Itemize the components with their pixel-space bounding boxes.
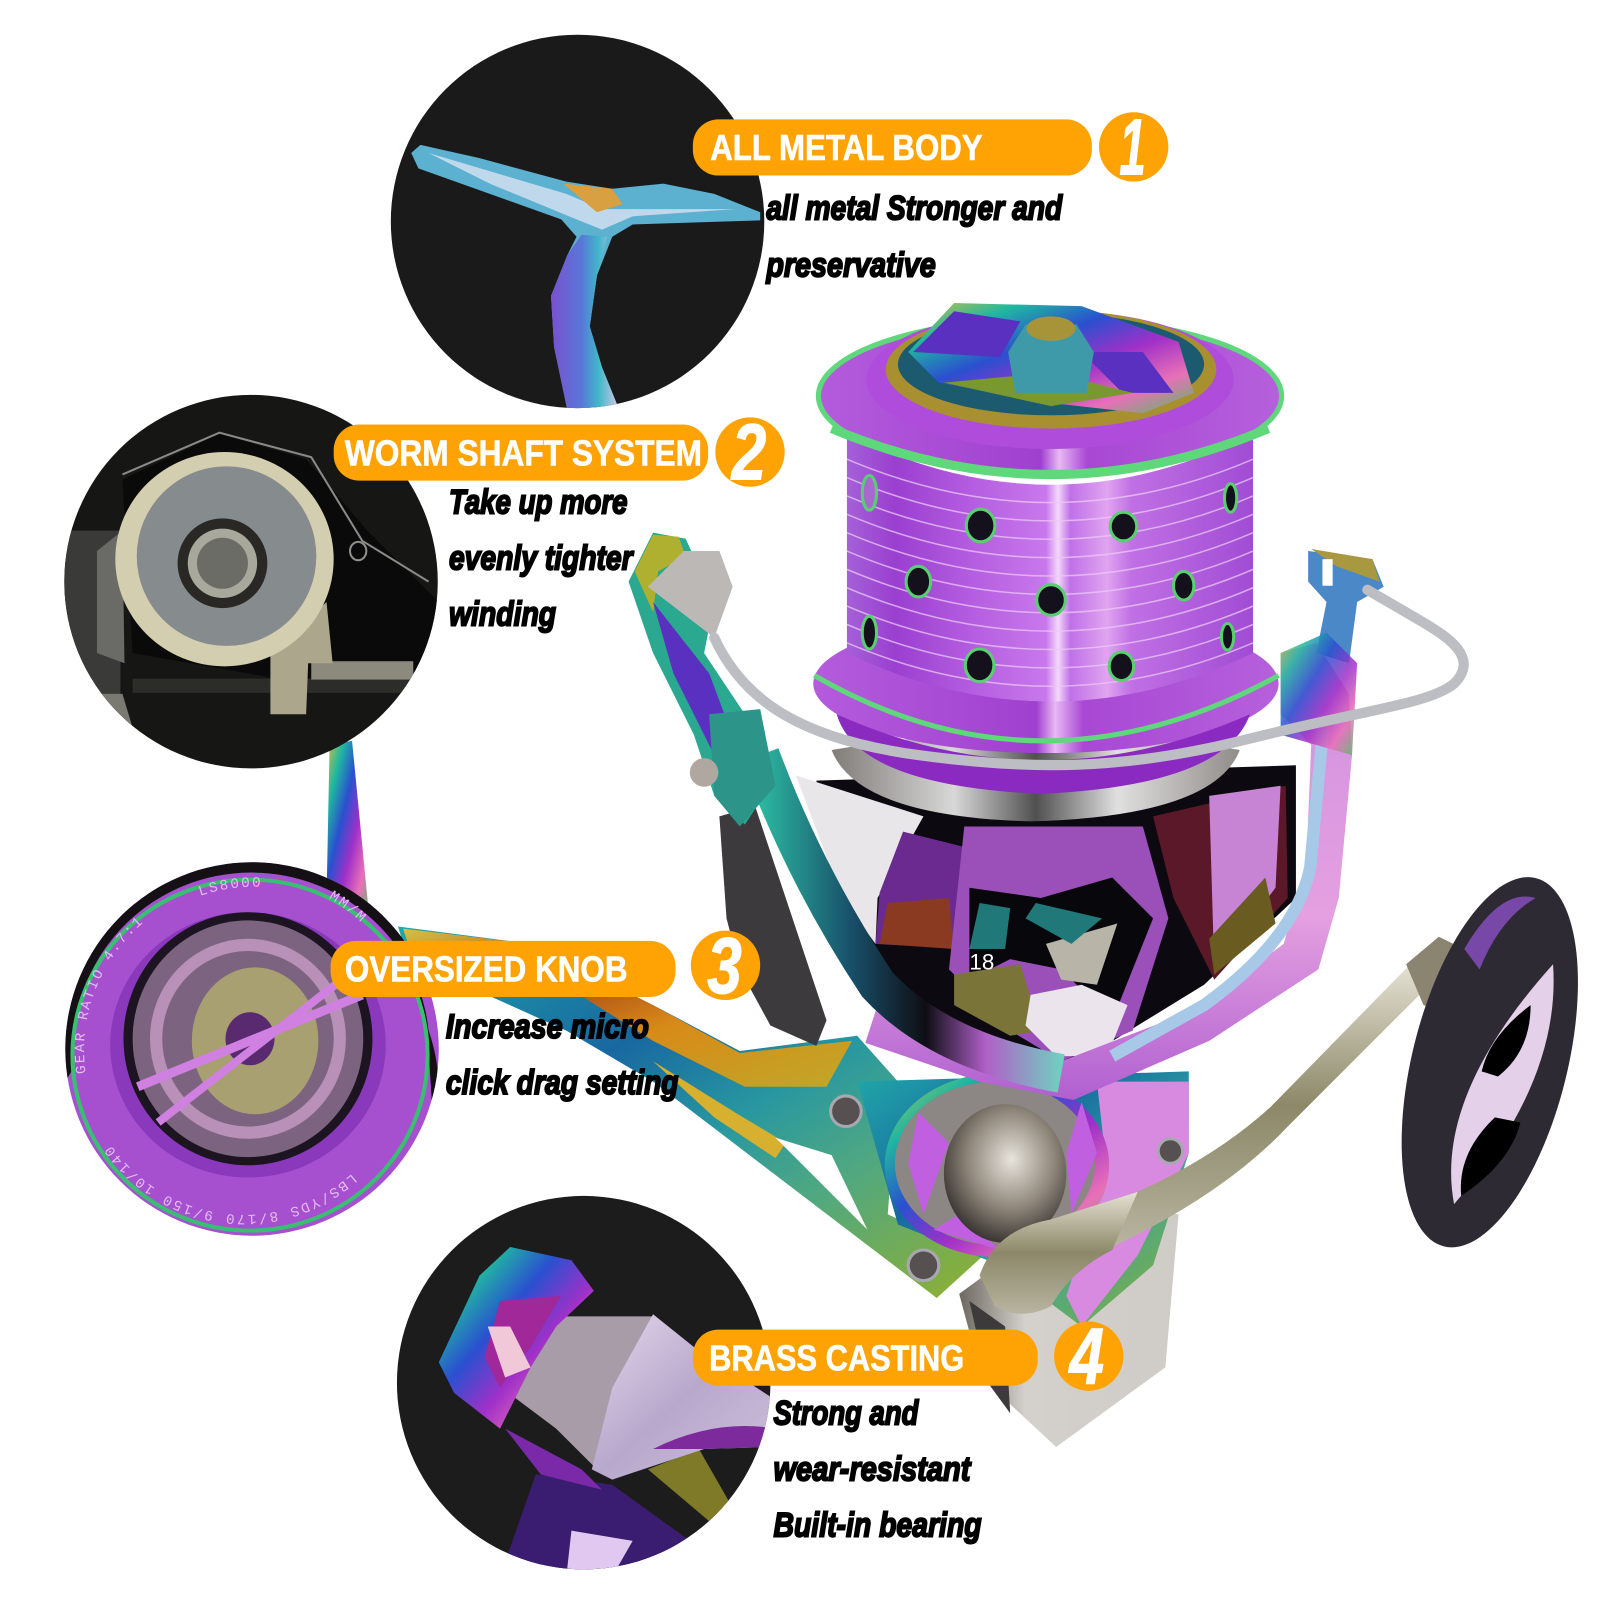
crank handle base: [980, 1192, 1138, 1314]
description: Increase micro: [446, 1008, 649, 1046]
knob face: [133, 920, 363, 1157]
callout 3: oversized knob: [331, 921, 760, 1102]
knob light: [488, 1327, 531, 1378]
description line 3: Built-in bearing: [773, 1507, 982, 1545]
rotor right lilac panel: [1209, 786, 1281, 969]
gear housing rim: [885, 1073, 1109, 1257]
hub inner: [188, 529, 257, 598]
spool lower flange green rim: [814, 676, 1279, 741]
gear dome: [944, 1104, 1066, 1243]
spool top flange: [818, 318, 1282, 473]
hub core: [197, 538, 248, 589]
handle T shape: [411, 145, 760, 410]
drag cap centre post: [1008, 324, 1094, 393]
worm spring: [311, 661, 413, 680]
number badge: [691, 931, 760, 1000]
fishing reel product illustration: [327, 303, 1600, 1447]
purple reflection: [653, 1426, 776, 1449]
spool grooves: [847, 459, 1253, 705]
frame outline: [122, 433, 429, 582]
spool top flange green front: [832, 429, 1268, 474]
white cutout in foot arm: [776, 1138, 867, 1230]
description line 2: wear-resistant: [773, 1451, 972, 1489]
description: all metal Stronger and: [766, 189, 1063, 227]
number: 2: [730, 408, 766, 497]
pattern ring: [156, 945, 340, 1133]
bail knob: [648, 551, 733, 638]
left gears: [64, 531, 120, 704]
spool top inner step: [866, 310, 1234, 449]
lower reel foot silver: [959, 1204, 1179, 1447]
heading text: WORM SHAFT SYSTEM: [345, 433, 702, 473]
spool holes: [862, 476, 1237, 682]
gear housing pink panel: [1066, 1082, 1189, 1327]
knob lilac lens: [1451, 964, 1554, 1204]
cross bars: [138, 995, 362, 1087]
heading pill: [693, 1330, 1038, 1386]
knob connector: [1406, 937, 1474, 1015]
knob outer ring: [1369, 859, 1600, 1265]
drag cap blue facet: [913, 311, 1173, 393]
gear housing body: [857, 1071, 1189, 1327]
dark inner ring: [123, 912, 372, 1165]
screws: [831, 1096, 1183, 1281]
description line 2: preservative: [765, 247, 936, 285]
heading text: BRASS CASTING: [709, 1338, 964, 1378]
description line 2: click drag setting: [446, 1064, 679, 1102]
callout 4: brass casting: [693, 1312, 1123, 1545]
bail arm screw: [690, 758, 718, 787]
dial text: gear ratio: GEAR RATIO 4.7:1: [74, 918, 142, 1074]
reel foot dark facet: [969, 1301, 1010, 1413]
number badge: [1099, 112, 1168, 182]
gear face: [137, 466, 316, 646]
black frame plate: [122, 434, 439, 684]
callout 2: worm shaft system: [334, 408, 785, 634]
knob purple highlight: [1464, 897, 1536, 969]
heading text: ALL METAL BODY: [710, 128, 983, 168]
bail arm left: [629, 533, 770, 824]
rotor left sweep arm: [760, 755, 1061, 1073]
number: 4: [1068, 1312, 1104, 1401]
reel stem behind oversized knob: [327, 741, 369, 918]
heading pill: [334, 424, 708, 481]
number badge: [1054, 1321, 1123, 1391]
rotor orange and purple cone: [876, 832, 964, 949]
rotor teal facets: [969, 903, 1102, 949]
neck purple: [505, 1429, 602, 1490]
centre hub: [226, 1012, 274, 1065]
rotor right window: [1153, 786, 1288, 980]
crank handle arm: [1112, 964, 1427, 1247]
number: 1: [1119, 102, 1146, 191]
gear housing inner: [895, 1082, 1095, 1245]
spool underside: [837, 714, 1250, 794]
purple band: [110, 912, 386, 1178]
green ring: [72, 880, 428, 1231]
dial text: capacity: LBS/YDS 8/170 9/150 10/140: [106, 1148, 357, 1224]
reel foot arm: [398, 927, 982, 1298]
drag cap dark interior: [898, 313, 1204, 415]
rotor right arm pink: [865, 643, 1352, 1100]
rainbow strip on foot arm: [653, 1061, 786, 1158]
rotor interior: [816, 765, 1296, 1066]
knob lower window: [1461, 1117, 1520, 1196]
bail arm purple inner: [653, 602, 740, 755]
description: Take up more: [449, 483, 628, 521]
bail mount gold top: [1311, 549, 1380, 582]
rotor olive facet: [954, 964, 1041, 1036]
centre disc: [192, 967, 318, 1114]
heading pill: [693, 119, 1092, 176]
rotor centre black: [969, 878, 1153, 1020]
rainbow knob: [439, 1247, 594, 1429]
gear rim: [115, 452, 334, 666]
bail arm gold edge: [635, 535, 686, 612]
bail wire: [714, 590, 1464, 765]
dial text: metric: MM/M: [329, 890, 366, 922]
description: Strong and: [773, 1394, 919, 1432]
bail mount arm right: [1281, 633, 1357, 755]
mounting window: [1322, 559, 1333, 586]
rotor right olive window: [1209, 878, 1276, 974]
callout 1: all metal body: [693, 102, 1168, 285]
lilac cone: [592, 1314, 776, 1480]
rotor interior silver reflection: [796, 776, 923, 944]
olive wedge: [648, 1450, 728, 1521]
bail arm lower block: [709, 709, 776, 827]
rotor dial label: 18: [969, 949, 994, 974]
hub ring: [178, 518, 267, 608]
heading text: OVERSIZED KNOB: [345, 950, 628, 990]
panel: circle 4 brass casting detail: [397, 1196, 776, 1577]
rotor right arm blue strip: [1112, 714, 1324, 1056]
spool lower flange: [813, 614, 1279, 753]
small hole: [350, 542, 366, 560]
lower stem highlight: [567, 1530, 633, 1570]
drag cap ring: [886, 310, 1216, 429]
panel: circle 2 worm shaft detail: [64, 395, 439, 768]
knob magenta reflection: [485, 1296, 561, 1388]
heading pill: [331, 941, 676, 997]
rotor orange reflection: [880, 898, 954, 949]
lower rail: [133, 679, 429, 693]
drag cap plate: [908, 303, 1194, 413]
dial text: model: LS8000: [198, 877, 260, 896]
rotor cup dark left panel: [719, 806, 827, 1046]
handle knob: [1369, 859, 1600, 1265]
silver ring under spool: [832, 732, 1240, 821]
panel: circle 1 handle detail: [391, 35, 764, 410]
rotor centre silver: [1046, 923, 1117, 985]
bail mount right: [1308, 551, 1384, 663]
lower stem: [508, 1474, 686, 1570]
description line 3: winding: [449, 596, 556, 634]
spool body: [847, 434, 1253, 702]
silver cylinder: [515, 1316, 653, 1469]
gear spokes: [908, 1102, 1097, 1250]
rotor centre chrome: [949, 827, 1168, 1061]
drag cap olive base: [944, 372, 1133, 406]
number: 3: [707, 921, 742, 1010]
rotor centre white highlight: [1026, 985, 1128, 1056]
description line 2: evenly tighter: [449, 539, 635, 577]
upper gold band of foot arm: [403, 929, 852, 1087]
bracket: [270, 602, 333, 714]
knob upper window: [1482, 1005, 1531, 1077]
black crescent: [65, 862, 438, 1100]
panel: circle 3 knob detail: [65, 862, 439, 1236]
drag cap post top: [1027, 316, 1076, 341]
number badge: [715, 417, 785, 487]
